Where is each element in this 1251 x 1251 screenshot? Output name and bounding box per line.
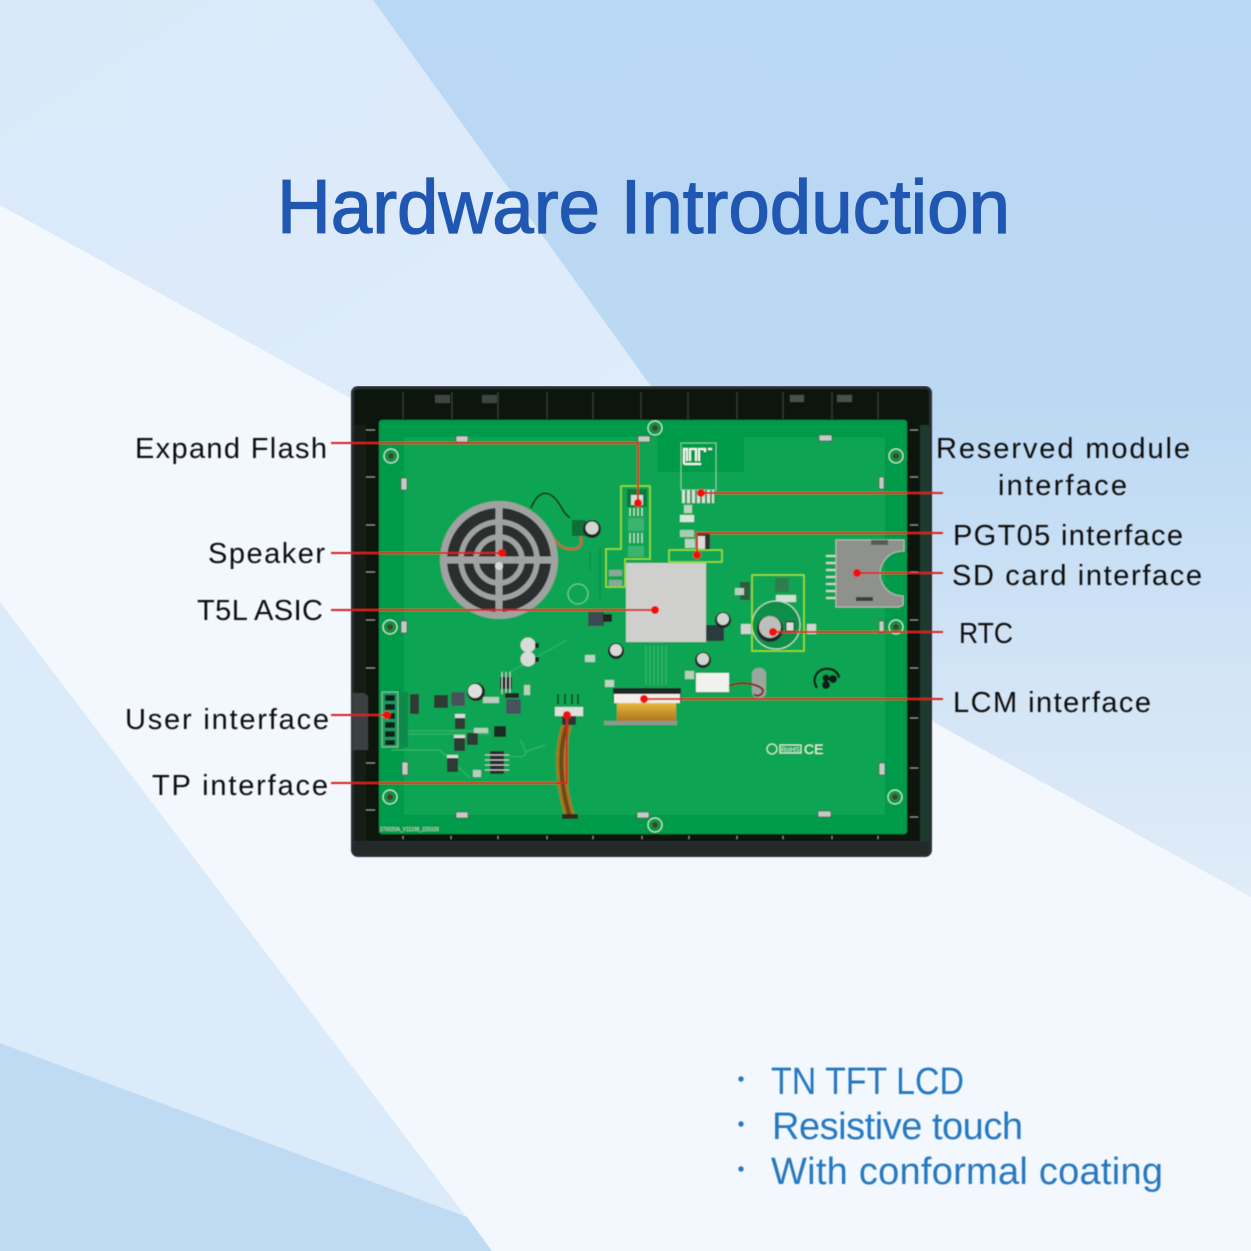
JST connector and wire — [685, 668, 766, 698]
T5L ASIC shield — [626, 563, 706, 642]
certification marks: CE — [804, 741, 823, 757]
silver clips — [401, 435, 885, 818]
labels: left: User interface — [125, 704, 329, 736]
certification marks — [767, 741, 823, 757]
capacitors near speaker — [568, 520, 612, 626]
flash chips — [609, 489, 647, 586]
feature list: TN TFT LCD — [771, 1061, 964, 1103]
callout lines and markers — [331, 443, 943, 783]
power circuit components — [392, 638, 567, 778]
labels: right — [936, 433, 1202, 719]
mounting holes — [383, 421, 903, 832]
RTC battery area — [735, 578, 816, 649]
title: Hardware Introduction — [277, 165, 1010, 250]
feature list: With conformal coating — [771, 1151, 1163, 1193]
user interface terminal block — [382, 692, 408, 747]
SD card slot — [826, 540, 904, 607]
labels: left: Expand Flash — [135, 433, 327, 465]
certification marks: RoHS — [781, 747, 800, 754]
speaker — [440, 493, 581, 619]
highlight boxes — [606, 486, 804, 651]
device: display enclosure with circuit board — [125, 386, 1202, 1193]
LCM connector and gold ribbon — [604, 688, 681, 725]
labels: right: RTC — [959, 618, 1013, 650]
touch panel connector and ribbon — [555, 694, 583, 819]
labels: right: LCM interface — [953, 687, 1151, 719]
labels: right: SD card interface — [952, 560, 1202, 592]
traces below ASIC — [585, 612, 731, 687]
labels: left — [125, 433, 329, 802]
labels: left: TP interface — [152, 770, 328, 802]
labels: left: T5L ASIC — [197, 595, 323, 627]
feature list — [738, 1061, 1163, 1193]
marking: black ink blob — [815, 669, 839, 689]
board code: 270020A_V11198_220328 — [380, 827, 439, 833]
labels: right: interface — [998, 470, 1127, 502]
feature list: Resistive touch — [772, 1106, 1023, 1148]
labels: right: PGT05 interface — [953, 520, 1183, 552]
labels: left: Speaker — [208, 538, 325, 570]
antenna module footprint — [680, 443, 716, 550]
circuit board — [379, 420, 907, 834]
labels: right: Reserved module — [936, 433, 1190, 465]
enclosure frame — [351, 386, 932, 857]
